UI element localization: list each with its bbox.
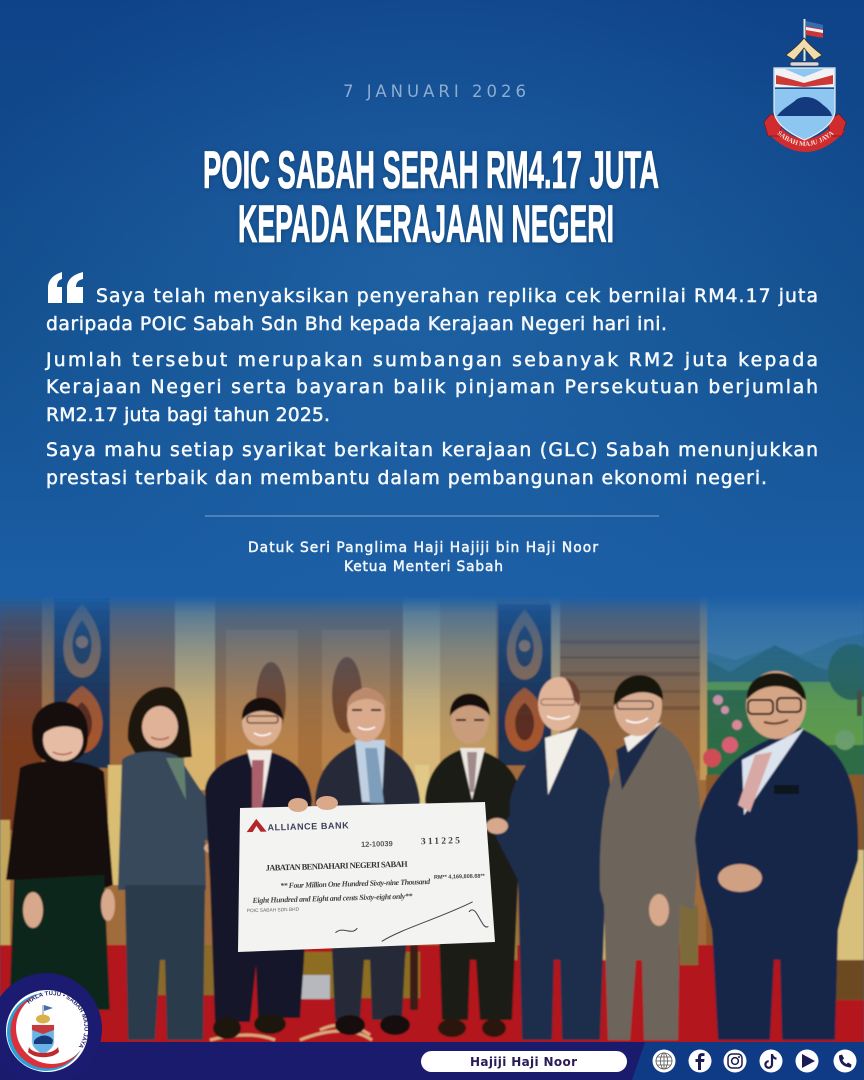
cheque: payee: JABATAN BENDAHARI NEGERI SABAH	[266, 860, 408, 873]
quote paragraph 1	[46, 286, 818, 335]
crest: clasped arms	[786, 38, 822, 60]
person 6: man in navy blazer	[486, 677, 610, 1040]
quote paragraph 2	[45, 350, 818, 426]
icon: instagram	[724, 1050, 746, 1072]
crest: motto ribbon: SABAH MAJU JAYA	[777, 131, 834, 146]
icon: opening quotation mark	[48, 272, 83, 303]
cheque: number: 12-10039	[361, 839, 393, 849]
badge: crest	[28, 1005, 59, 1057]
attribution: Datuk Seri Panglima Haji Hajiji bin Haji Noor	[248, 540, 598, 556]
icon: youtube play	[796, 1050, 818, 1072]
person 4: man in grey suit	[315, 688, 420, 1035]
badge: ring text: HALA TUJU • SABAH MAJU JAYA	[26, 990, 88, 1048]
cheque: amount box: RM** 4,169,808.68**	[434, 873, 486, 881]
crest: flag	[804, 19, 823, 61]
person 5: man in dark brown suit	[425, 694, 522, 1037]
circular badge: Hala Tuju Sabah Maju Jaya	[0, 973, 102, 1072]
icon: facebook	[688, 1050, 712, 1072]
cheque: amount in words: ** Four Million One Hundred Sixty-nine Thousand	[280, 877, 430, 890]
icon: tiktok	[760, 1050, 782, 1072]
footer: blue social section	[632, 1042, 864, 1080]
crest: shield	[774, 68, 835, 140]
person 2: woman in grey-blue suit	[118, 687, 240, 1040]
quote paragraph 2: Jumlah tersebut merupakan sumbangan sebanyak RM2 juta kepada	[45, 350, 818, 371]
attribution: Ketua Menteri Sabah	[344, 559, 503, 575]
person 3: man in navy suit	[205, 698, 312, 1039]
footer bar	[0, 1042, 864, 1080]
quote paragraph 2: Kerajaan Negeri serta bayaran balik pinjaman Persekutuan berjumlah	[46, 377, 818, 398]
person 7: man in grey-brown suit	[600, 675, 700, 1040]
quote paragraph 2: RM2.17 juta bagi tahun 2025.	[46, 405, 330, 426]
cheque: date: 311225	[421, 836, 462, 847]
cheque: bank name: ALLIANCE BANK	[267, 820, 349, 833]
cheque: bank logo	[246, 819, 267, 832]
photo: room backdrop fading into the blue background	[0, 590, 864, 965]
person 8: man in navy suit	[695, 671, 858, 1040]
photo: group of officials holding a mock cheque	[0, 590, 864, 1045]
quote paragraph 3: Saya mahu setiap syarikat berkaitan kerajaan (GLC) Sabah menunjukkan	[46, 440, 818, 461]
person 1: woman in black	[6, 702, 115, 1010]
quote paragraph 1: Saya telah menyaksikan penyerahan replika cek bernilai RM4.17 juta	[96, 286, 818, 307]
icon: website globe	[652, 1050, 676, 1072]
photo: furniture and carpet	[0, 765, 864, 1045]
date: 7 JANUARI 2026	[343, 82, 526, 101]
title	[203, 141, 659, 254]
crest: wreath	[790, 62, 819, 66]
cheque replica	[238, 796, 495, 952]
quote paragraph 3	[46, 440, 818, 489]
attribution	[248, 540, 598, 575]
footer: name pill: Hajiji Haji Noor	[470, 1055, 577, 1069]
quote paragraph 3: prestasi terbaik dan membantu dalam pembangunan ekonomi negeri.	[46, 468, 767, 489]
cheque: signatures	[335, 901, 489, 943]
footer: name pill	[421, 1051, 627, 1072]
icon: phone	[834, 1050, 856, 1072]
quote paragraph 1: daripada POIC Sabah Sdn Bhd kepada Kerajaan Negeri hari ini.	[46, 314, 667, 335]
cheque: hands	[288, 796, 338, 812]
cheque: amount in words line 2: Eight Hundred and Eight and cents Sixty-eight only**	[251, 892, 413, 905]
cheque: account holder: POIC SABAH SDN BHD	[247, 907, 300, 914]
state crest: Sabah coat of arms	[764, 19, 846, 152]
